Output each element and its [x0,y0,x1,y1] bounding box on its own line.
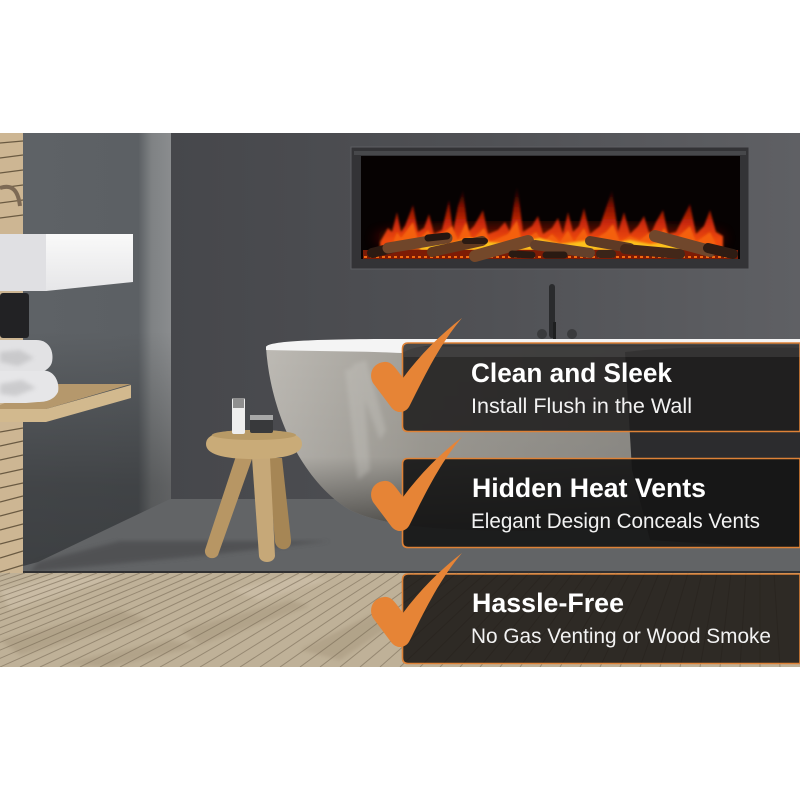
firebox [361,156,740,259]
subheading: Elegant Design Conceals Vents [471,510,760,533]
wall faucet [537,284,577,339]
panel background [402,343,800,432]
concrete floor platform [23,499,800,573]
feature panel: Hassle-Free [371,553,800,664]
heading: Clean and Sleek [471,358,673,388]
flames [372,190,728,250]
fireplace frame [351,147,749,269]
dark towel on tub [625,348,800,466]
rolled towels [0,340,58,403]
freestanding bathtub [266,339,800,531]
panel background [402,458,800,548]
left wood slat wall [0,133,24,585]
panel background [402,574,800,664]
left wall [23,133,171,573]
subheading: No Gas Venting or Wood Smoke [471,625,771,648]
photo scene: bathroom [0,133,800,667]
subheading: Install Flush in the Wall [471,395,692,418]
wood stool with bottles [205,398,302,562]
electric fireplace [351,147,749,269]
check mark icon [371,553,462,647]
logs [372,236,733,256]
sink basin [0,234,133,291]
heading: Hassle-Free [472,588,624,618]
check mark icon [371,437,462,531]
back wall [170,133,800,503]
wood shelf [0,384,131,422]
ember bed [363,250,738,259]
wood plank floor [0,573,800,667]
left brass faucet [0,187,20,206]
heading: Hidden Heat Vents [472,473,706,503]
check mark icon [371,318,462,412]
black bottle [0,293,29,338]
feature panel: Clean and Sleek [371,318,800,432]
feature panel: Hidden Heat Vents [371,437,800,548]
